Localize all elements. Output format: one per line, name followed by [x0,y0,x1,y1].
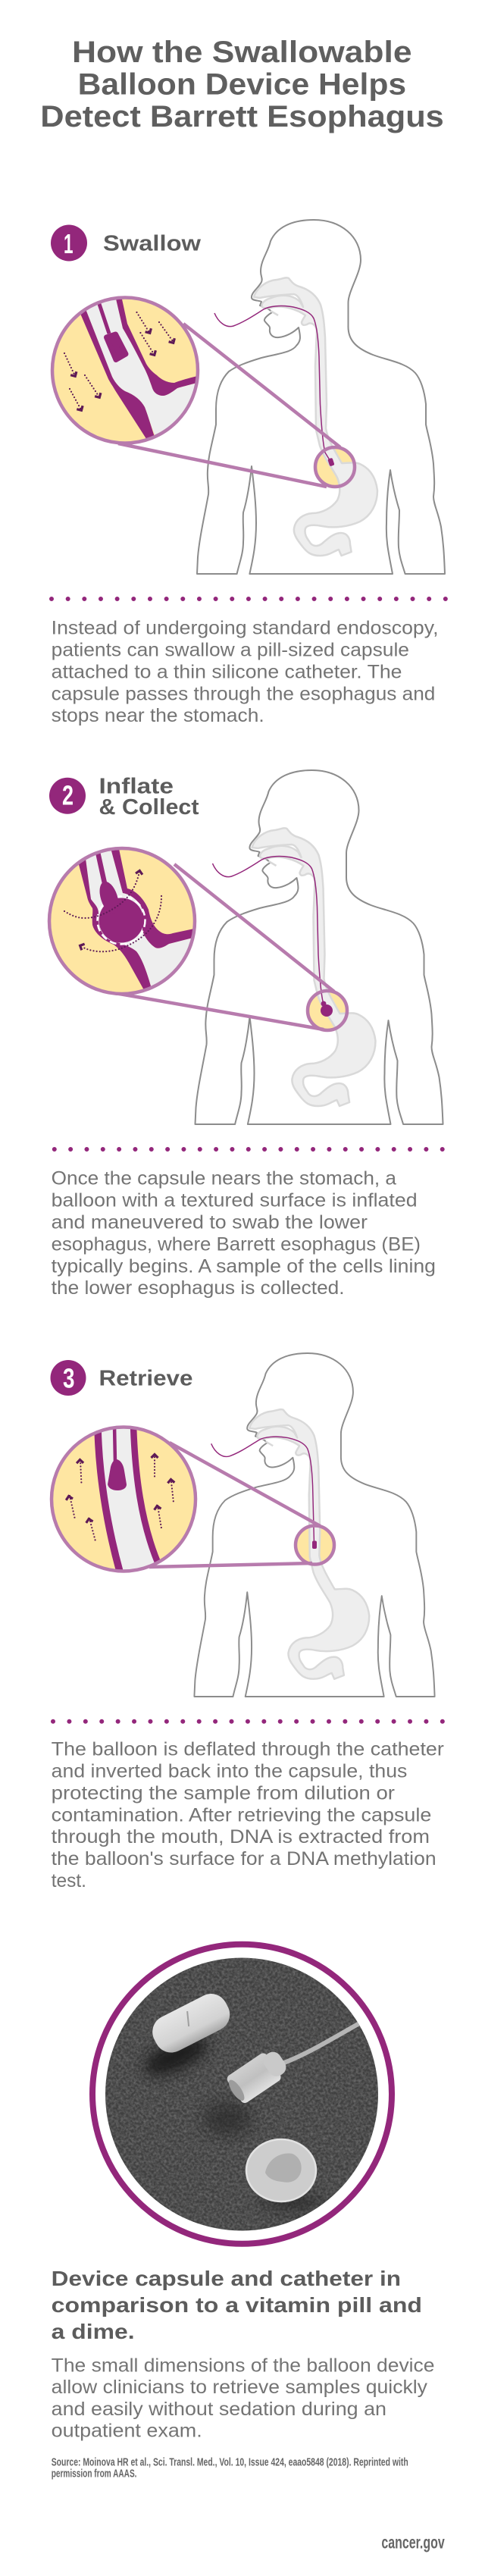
esophagus lumen [86,851,191,986]
cancer.gov credit: cancer.gov [381,2533,445,2552]
esophagus lumen [86,300,195,435]
dotted divider 2 [55,1147,443,1152]
capsule [100,882,118,907]
step 3 heading: Retrieve [99,1366,192,1390]
felt background [99,1952,386,2236]
panel: step 1 swallow diagram [52,220,445,574]
magnified view [49,845,205,997]
title: How the Swallowable [72,36,412,69]
catheter [98,299,109,334]
text block: step 2: esophagus, where Barrett esophagus (BE) [52,1233,421,1255]
shadows [139,2029,322,2210]
digestive tract [254,277,377,556]
esophagus walls [98,1425,121,1577]
catheter tube [282,2023,361,2064]
body outline [196,770,443,1124]
step 2 number badge [49,778,86,814]
catheter [114,1425,115,1463]
step 1 number badge: 1 [64,228,73,259]
vitamin pill [152,1994,230,2053]
caption text: The small dimensions of the balloon device [52,2355,434,2376]
caption heading [52,2267,422,2343]
panel: step 2 inflate and collect diagram [49,770,443,1124]
title [40,36,444,133]
caption text: allow clinicians to retrieve samples quickly [52,2377,428,2398]
small circle ring [315,447,355,487]
step 2 heading: Inflate [99,775,174,799]
text block: step 3: The balloon is deflated through the catheter [52,1739,444,1760]
zoom lines [115,864,334,1029]
device capsule [227,2051,286,2103]
inflated balloon [97,896,146,945]
title: Detect Barrett Esophagus [40,100,444,133]
digestive tract [252,828,376,1106]
small circle ring [308,991,347,1030]
esophagus lumen [102,1428,155,1569]
step 2 number badge: 2 [62,780,74,811]
up arrows [65,1454,174,1541]
text block: step 1: attached to a thin silicone catheter. The [52,661,402,682]
body outline [194,1353,435,1697]
catheter [212,857,326,1011]
small circle ring [296,1525,334,1565]
step 3 number badge: 3 [63,1363,74,1394]
text block: step 2: and maneuvered to swab the lower [52,1212,368,1233]
capsule small [312,1540,317,1549]
step 3 number badge [50,1360,86,1396]
step 2 heading: & Collect [99,795,199,819]
text block: step 1: stops near the stomach. [52,705,264,726]
down arrows [64,312,177,412]
title: Balloon Device Helps [78,68,406,102]
catheter [214,306,331,462]
text block: step 2: Once the capsule nears the stomach, a [52,1168,396,1189]
text block: step 2: typically begins. A sample of the cells lining [52,1255,436,1277]
text block: step 1: patients can swallow a pill-sized capsule [52,640,409,661]
text block: step 3: through the mouth, DNA is extracted from [52,1826,430,1847]
rotation arrows [64,870,161,951]
caption heading: Device capsule and catheter in [52,2267,401,2290]
digestive tract [249,1409,369,1679]
source note [52,2455,408,2480]
text block: step 3: contamination. After retrieving the capsule [52,1804,431,1825]
balloon small [321,1001,333,1017]
step 1 number badge [51,224,87,261]
panel: step 3 retrieve diagram [52,1353,435,1697]
text block: step 2: the lower esophagus is collected. [52,1277,345,1299]
text block: step 1 [52,618,438,726]
dotted divider 1 [52,597,446,601]
text block: step 2 [52,1168,436,1299]
caption text: outpatient exam. [52,2421,202,2442]
step 1 heading: Swallow [103,232,201,256]
source note: permission from AAAS. [52,2467,136,2480]
body outline [197,220,445,574]
zoom lines [118,324,340,487]
photo: capsule, pill and dime in a ringed circle [92,1945,392,2244]
esophagus walls [79,860,151,989]
zoom lines [149,1443,320,1567]
text block: step 1: Instead of undergoing standard endoscopy, [52,618,438,639]
capsule [106,334,126,359]
capsule small [327,458,335,466]
caption heading: a dime. [52,2320,135,2343]
photo ring [92,1945,392,2244]
dime [246,2139,316,2202]
step 2 heading [99,775,199,819]
caption text [52,2355,434,2442]
magnified view [52,1425,196,1577]
caption heading: comparison to a vitamin pill and [52,2293,422,2317]
small magnified area [297,1528,333,1562]
text block: step 3: and inverted back into the capsule, thus [52,1760,407,1782]
caption text: and easily without sedation during an [52,2399,386,2420]
small magnified area [317,449,352,485]
text block: step 3 [52,1739,444,1891]
text block: step 3: the balloon's surface for a DNA methylation [52,1848,436,1869]
capsule [108,1459,127,1490]
text block: step 3: protecting the sample from dilution or [52,1782,395,1804]
dotted divider 3 [53,1719,443,1724]
text block: step 1: capsule passes through the esophagus and [52,683,435,704]
esophagus walls [80,311,155,438]
catheter [96,845,105,883]
catheter [211,1437,314,1544]
text block: step 2: balloon with a textured surface is inflated [52,1190,418,1211]
text block: step 3: test. [52,1870,86,1891]
small magnified area [309,993,346,1029]
magnified view [52,296,205,443]
